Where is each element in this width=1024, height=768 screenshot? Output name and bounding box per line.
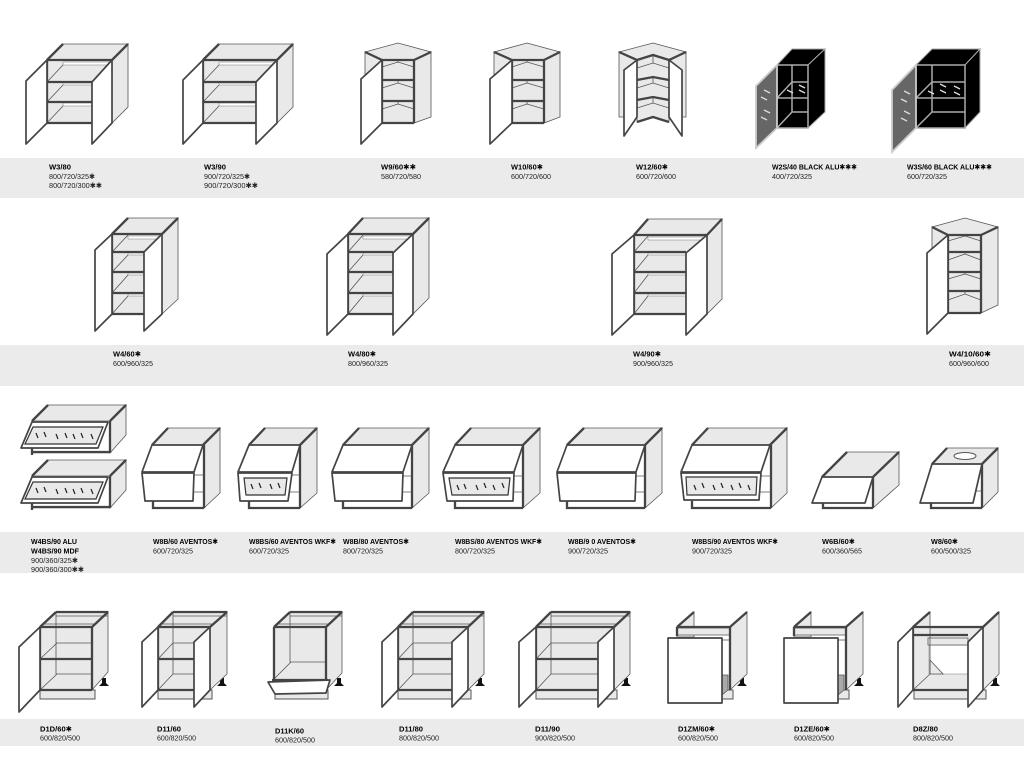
label W3/80: 800/720/300✱✱	[49, 181, 102, 190]
label D1D/60	[40, 724, 80, 743]
cabinet W10/60	[490, 43, 560, 144]
cabinet W4BS/90 ALU	[21, 405, 126, 455]
label D8Z/80: D8Z/80	[913, 724, 938, 734]
label W12/60: W12/60✱	[636, 162, 668, 172]
cabinet W6B/60	[812, 452, 899, 508]
label W8B/80 AVENTOS: W8B/80 AVENTOS✱	[343, 537, 409, 546]
label D1ZM/60: 600/820/500	[678, 734, 718, 743]
label W6B/60: W6B/60✱	[822, 537, 855, 546]
label W8BS/90 AVENTOS WKF: W8BS/90 AVENTOS WKF✱	[692, 537, 778, 546]
label W4/60	[113, 350, 153, 368]
label W8BS/80 AVENTOS WKF: W8BS/80 AVENTOS WKF✱	[455, 537, 542, 546]
label D11/90: D11/90	[535, 724, 560, 734]
label D1D/60: 600/820/500	[40, 734, 80, 743]
label D8Z/80	[913, 724, 953, 743]
cabinet W8BS/90 AVENTOS WKF	[681, 428, 787, 508]
label W8/60: W8/60✱	[931, 537, 958, 546]
label D1ZM/60: D1ZM/60✱	[678, 724, 715, 734]
label W8/60: 600/500/325	[931, 546, 971, 556]
cabinet W4/10/60	[927, 218, 998, 334]
label D11/90	[535, 724, 575, 743]
label W6B/60	[822, 537, 862, 556]
label W6B/60: 600/360/565	[822, 546, 862, 556]
label D11/60: D11/60	[157, 724, 181, 734]
cabinet D11K/60	[268, 612, 344, 699]
label W8BS/80 AVENTOS WKF: 800/720/325	[455, 546, 495, 556]
label W3/90: W3/90	[204, 162, 226, 172]
label W9/60: 580/720/580	[381, 172, 421, 181]
label D11/80: D11/80	[399, 724, 423, 734]
label D11/80: 800/820/500	[399, 734, 439, 743]
label W3S/60 BLACK ALU: 600/720/325	[907, 172, 947, 181]
cabinet D11/90	[519, 612, 631, 707]
label W4BS/90: W4BS/90 MDF	[31, 546, 79, 556]
label W9/60: W9/60✱✱	[381, 162, 416, 172]
label W3/80: 800/720/325✱	[49, 172, 95, 181]
label W8B/60 AVENTOS: W8B/60 AVENTOS✱	[153, 537, 218, 546]
cabinet W3/80	[26, 44, 128, 144]
label W3/90	[204, 162, 258, 190]
panel: row 2 tall wall cabinets	[0, 218, 1024, 386]
label W10/60	[511, 162, 551, 181]
label W4/90	[633, 350, 673, 368]
label W8BS/60 AVENTOS WKF: W8BS/60 AVENTOS WKF✱	[249, 537, 336, 546]
label W3S/60 BLACK ALU: W3S/60 BLACK ALU✱✱✱	[907, 162, 992, 172]
label D8Z/80: 800/820/500	[913, 734, 953, 743]
label W8B/9 0 AVENTOS: 900/720/325	[568, 546, 608, 556]
label W8BS/60 AVENTOS WKF	[249, 537, 336, 556]
label D11K/60: D11K/60	[275, 726, 304, 736]
label W4/10/60: W4/10/60✱	[949, 350, 991, 358]
label D11/80	[399, 724, 439, 743]
cabinet W8B/80 AVENTOS	[332, 428, 429, 508]
cabinet W12/60	[619, 43, 686, 136]
label W8BS/90 AVENTOS WKF	[692, 537, 778, 556]
cabinet W8/60	[920, 448, 998, 508]
label W4BS/90	[31, 537, 84, 574]
label W4/60: W4/60✱	[113, 350, 141, 358]
cabinet W8BS/80 AVENTOS WKF	[443, 428, 540, 508]
cabinet W3S/60 black	[892, 49, 980, 152]
label W8B/60 AVENTOS	[153, 537, 218, 556]
label W8B/80 AVENTOS	[343, 537, 409, 556]
cabinet D11/60	[142, 612, 227, 707]
label W8B/60 AVENTOS: 600/720/325	[153, 546, 193, 556]
label W10/60: W10/60✱	[511, 162, 543, 172]
label W10/60: 600/720/600	[511, 172, 551, 181]
cabinet W8B/90 AVENTOS	[557, 428, 662, 508]
label W12/60	[636, 162, 676, 181]
label D11/60: 600/820/500	[157, 734, 196, 743]
label W12/60: 600/720/600	[636, 172, 676, 181]
cabinet W2S/40 black	[756, 49, 825, 148]
label W4BS/90: W4BS/90 ALU	[31, 537, 77, 546]
cabinet D1ZM/60	[668, 612, 747, 703]
label D1ZM/60	[678, 724, 718, 743]
label D1ZE/60: D1ZE/60✱	[794, 724, 830, 734]
cabinet W3/90	[183, 44, 293, 144]
label W4/80: 800/960/325	[348, 359, 388, 368]
label W4/10/60	[949, 350, 991, 368]
label W8BS/90 AVENTOS WKF: 900/720/325	[692, 546, 732, 556]
label W3/90: 900/720/325✱	[204, 172, 250, 181]
label W4/90: 900/960/325	[633, 359, 673, 368]
panel: row 4 base cabinets	[0, 612, 1024, 746]
label W8B/9 0 AVENTOS	[568, 537, 636, 556]
cabinet W8BS/60 AVENTOS WKF	[238, 428, 317, 508]
label D1ZE/60	[794, 724, 834, 743]
cabinet W4/80	[327, 218, 429, 335]
label W4/10/60: 600/960/600	[949, 359, 989, 368]
label D11K/60: 600/820/500	[275, 736, 315, 745]
label W4/80	[348, 350, 388, 368]
label W3/80	[49, 162, 102, 190]
label W3/80: W3/80	[49, 162, 71, 172]
label W4/80: W4/80✱	[348, 350, 376, 358]
panel: row 3 lift-up cabinets	[0, 405, 1024, 574]
label W8B/9 0 AVENTOS: W8B/9 0 AVENTOS✱	[568, 537, 636, 546]
label D1ZE/60: 600/820/500	[794, 734, 834, 743]
label D1D/60: D1D/60✱	[40, 724, 72, 734]
cabinet W4/90	[612, 219, 722, 335]
label D11/60	[157, 724, 196, 743]
panel: row 1 wall cabinets	[0, 43, 1024, 198]
label W8/60	[931, 537, 971, 556]
label W3/90: 900/720/300✱✱	[204, 181, 258, 190]
label W2S/40 BLACK ALU: 400/720/325	[772, 172, 812, 181]
label W4BS/90: 900/360/325✱	[31, 556, 78, 565]
cabinet D1ZE/60	[784, 612, 864, 703]
cabinet W4BS/90 MDF	[21, 460, 126, 510]
label D11/90: 900/820/500	[535, 734, 575, 743]
label W8BS/60 AVENTOS WKF: 600/720/325	[249, 546, 289, 556]
label W8BS/80 AVENTOS WKF	[455, 537, 542, 556]
cabinet W9/60	[361, 43, 431, 144]
label W4/90: W4/90✱	[633, 350, 661, 358]
label W3S/60 BLACK ALU	[907, 162, 992, 181]
cabinet D8Z/80	[898, 612, 1000, 707]
label W4BS/90: 900/360/300✱✱	[31, 565, 84, 574]
label W2S/40 BLACK ALU: W2S/40 BLACK ALU✱✱✱	[772, 162, 857, 172]
label W9/60	[381, 162, 421, 181]
label W2S/40 BLACK ALU	[772, 162, 857, 181]
cabinet W4/60	[95, 218, 178, 331]
label W8B/80 AVENTOS: 800/720/325	[343, 546, 383, 556]
cabinet D11/80	[382, 612, 485, 707]
cabinet W8B/60 AVENTOS	[142, 428, 220, 508]
label D11K/60	[275, 726, 315, 745]
label W4/60: 600/960/325	[113, 359, 153, 368]
cabinet D1D/60	[19, 612, 109, 712]
